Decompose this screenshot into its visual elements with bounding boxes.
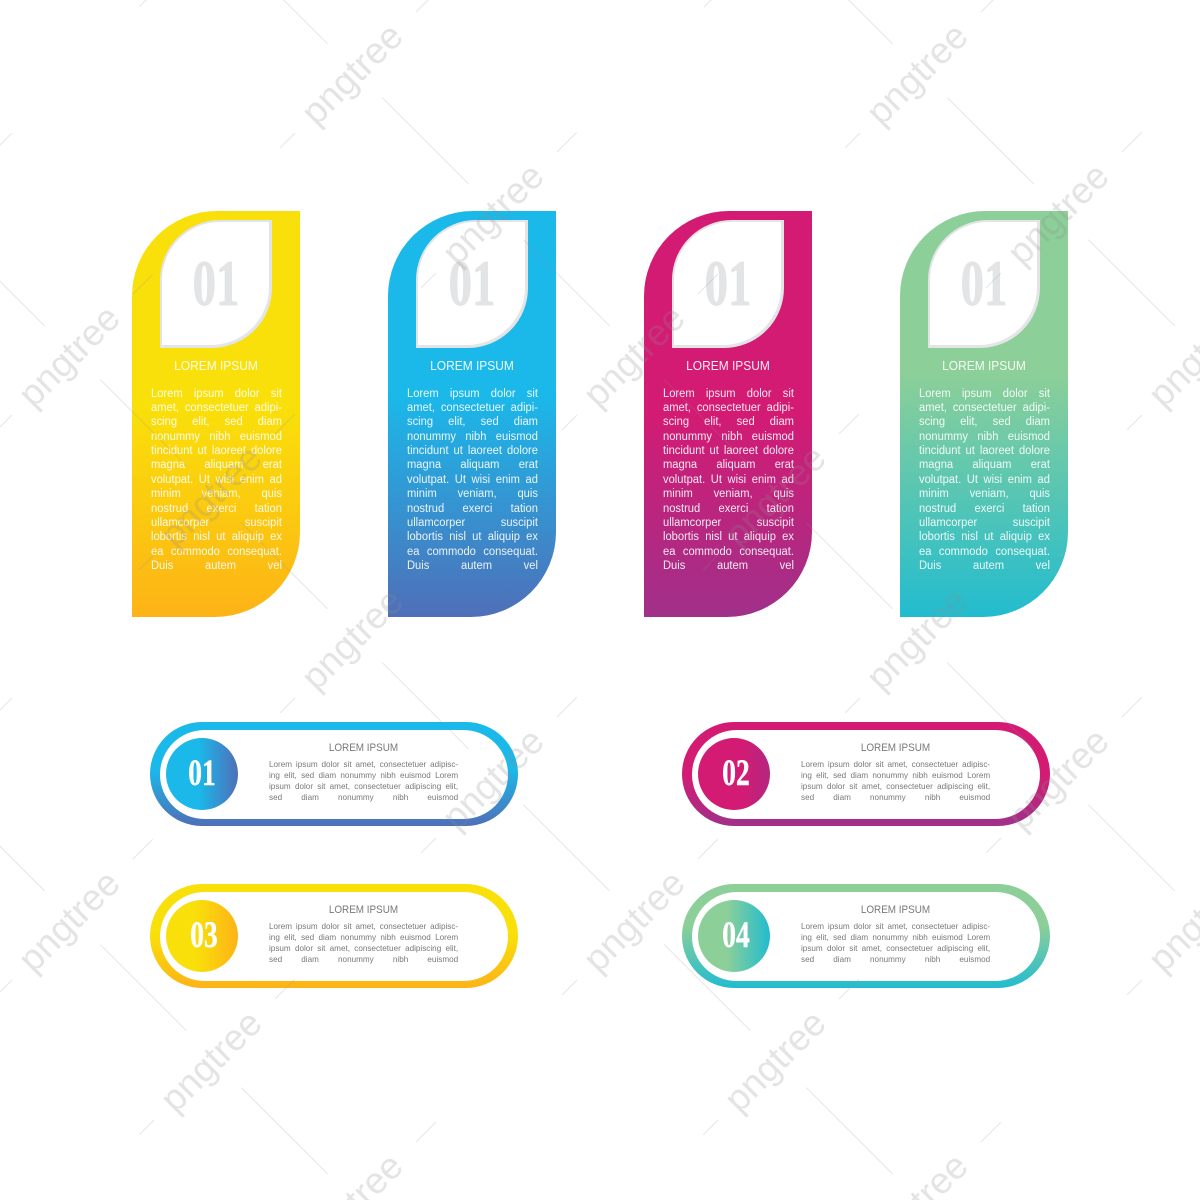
leaf badge with number 01 [160,220,272,348]
watermark overlay: pngtree [858,15,976,133]
watermark overlay: pngtree [575,862,693,980]
pill body text: ing elit, sed diam nonummy nibh euismod Lorem [269,770,458,780]
card body text [663,388,794,572]
pill body text: ipsum dolor sit amet, consectetuer adipiscing elit, [269,943,458,953]
card body text: Lorem ipsum dolor sit [407,388,538,400]
card heading: LOREM IPSUM [174,358,258,373]
card body text: amet, consectetuer adipi- [407,402,538,414]
card body text: nostrud exerci tation [663,502,794,514]
card body text: nostrud exerci tation [919,502,1050,514]
number circle 03 [166,900,238,972]
card body text: nonummy nibh euismod [663,431,794,443]
card body text: minim veniam, quis [919,488,1050,500]
card body text: magna aliquam erat [151,459,282,471]
card body text: ea commodo consequat. [407,546,538,558]
card body text: Duis autem vel [151,560,282,572]
card body text: minim veniam, quis [151,488,282,500]
pill body text: ipsum dolor sit amet, consectetuer adipiscing elit, [801,781,990,791]
panel: magenta card 01 [644,211,812,617]
card body text: scing elit, sed diam [151,416,282,428]
card body text [151,388,282,572]
pill body text [801,921,990,964]
pill body text [269,759,458,802]
card body text: Duis autem vel [663,560,794,572]
card body text: scing elit, sed diam [919,416,1050,428]
pill body text: Lorem ipsum dolor sit amet, consectetuer adipisc- [269,921,458,931]
card body text: volutpat. Ut wisi enim ad [407,474,538,486]
watermark overlay: pngtree [434,720,552,838]
pill body text: Lorem ipsum dolor sit amet, consectetuer adipisc- [269,759,458,769]
card body text: magna aliquam erat [407,459,538,471]
card body text: magna aliquam erat [919,459,1050,471]
card body text: magna aliquam erat [663,459,794,471]
card body text: Duis autem vel [407,560,538,572]
card body text: amet, consectetuer adipi- [663,402,794,414]
watermark overlay: pngtree [152,437,270,555]
leaf badge with number 01 [672,220,784,348]
pill body text: ing elit, sed diam nonummy nibh euismod Lorem [269,932,458,942]
number circle 03: 03 [190,914,218,956]
number circle 02 [698,738,770,810]
pill body text [269,921,458,964]
card body text: ullamcorper suscipit [151,517,282,529]
card body text: ea commodo consequat. [663,546,794,558]
watermark overlay: pngtree [152,1002,270,1120]
panel: blue card 01 [388,211,556,617]
pill body text: sed diam nonummy nibh euismod [269,954,458,964]
pill heading: LOREM IPSUM [329,742,398,754]
card body text: tincidunt ut laoreet dolore [919,445,1050,457]
leaf badge with number 01 [416,220,528,348]
leaf badge with number 01: 01 [705,248,751,320]
pill body text [801,759,990,802]
number circle 04: 04 [722,914,750,956]
card body text: nostrud exerci tation [151,502,282,514]
card body text: ea commodo consequat. [919,546,1050,558]
watermark overlay: pngtree [434,155,552,273]
number circle 04 [698,900,770,972]
pill heading: LOREM IPSUM [861,904,930,916]
pill body text: sed diam nonummy nibh euismod [801,954,990,964]
pill body text: ipsum dolor sit amet, consectetuer adipiscing elit, [269,781,458,791]
card body text: tincidunt ut laoreet dolore [407,445,538,457]
card body text: lobortis nisl ut aliquip ex [919,531,1050,543]
card body text: lobortis nisl ut aliquip ex [663,531,794,543]
card body text: minim veniam, quis [663,488,794,500]
card body text: Lorem ipsum dolor sit [663,388,794,400]
card heading: LOREM IPSUM [942,358,1026,373]
watermark overlay: pngtree [10,862,128,980]
card body text: nostrud exerci tation [407,502,538,514]
number circle 02: 02 [722,752,750,794]
pill body text: ipsum dolor sit amet, consectetuer adipiscing elit, [801,943,990,953]
pill body text: sed diam nonummy nibh euismod [801,792,990,802]
card heading: LOREM IPSUM [430,358,514,373]
panel: blue pill 01 [150,722,518,826]
pill body text: sed diam nonummy nibh euismod [269,792,458,802]
card heading: LOREM IPSUM [686,358,770,373]
card body text: Duis autem vel [919,560,1050,572]
watermark overlay: pngtree [293,580,411,698]
leaf badge with number 01: 01 [193,248,239,320]
card body text: amet, consectetuer adipi- [151,402,282,414]
card body text: lobortis nisl ut aliquip ex [407,531,538,543]
panel: yellow card 01 [132,211,300,617]
watermark overlay: pngtree [575,297,693,415]
watermark overlay: pngtree [716,437,834,555]
pill heading: LOREM IPSUM [861,742,930,754]
panel: green card 01 [900,211,1068,617]
card body text: minim veniam, quis [407,488,538,500]
card body text: Lorem ipsum dolor sit [151,388,282,400]
card body text: volutpat. Ut wisi enim ad [919,474,1050,486]
card body text: ea commodo consequat. [151,546,282,558]
card body text: ullamcorper suscipit [663,517,794,529]
leaf badge with number 01: 01 [961,248,1007,320]
card body text: Lorem ipsum dolor sit [919,388,1050,400]
card body text: tincidunt ut laoreet dolore [151,445,282,457]
leaf badge with number 01 [928,220,1040,348]
pill body text: ing elit, sed diam nonummy nibh euismod Lorem [801,932,990,942]
watermark overlay: pngtree [999,155,1117,273]
leaf badge with number 01: 01 [449,248,495,320]
pill heading: LOREM IPSUM [329,904,398,916]
watermark overlay: pngtree [858,580,976,698]
card body text: ullamcorper suscipit [407,517,538,529]
number circle 01 [166,738,238,810]
pill body text: Lorem ipsum dolor sit amet, consectetuer adipisc- [801,759,990,769]
panel: yellow pill 03 [150,884,518,988]
card body text [407,388,538,572]
card body text: amet, consectetuer adipi- [919,402,1050,414]
pill body text: Lorem ipsum dolor sit amet, consectetuer adipisc- [801,921,990,931]
card body text: nonummy nibh euismod [151,431,282,443]
watermark overlay: pngtree [10,297,128,415]
watermark overlay: pngtree [716,1002,834,1120]
card body text: nonummy nibh euismod [919,431,1050,443]
card body text: scing elit, sed diam [663,416,794,428]
watermark overlay: pngtree [999,720,1117,838]
card body text: ullamcorper suscipit [919,517,1050,529]
card body text: scing elit, sed diam [407,416,538,428]
card body text: volutpat. Ut wisi enim ad [151,474,282,486]
card body text: tincidunt ut laoreet dolore [663,445,794,457]
watermark overlay: pngtree [293,15,411,133]
number circle 01: 01 [188,752,216,794]
pill body text: ing elit, sed diam nonummy nibh euismod Lorem [801,770,990,780]
card body text [919,388,1050,572]
panel: magenta pill 02 [682,722,1050,826]
card body text: volutpat. Ut wisi enim ad [663,474,794,486]
panel: green pill 04 [682,884,1050,988]
card body text: lobortis nisl ut aliquip ex [151,531,282,543]
card body text: nonummy nibh euismod [407,431,538,443]
